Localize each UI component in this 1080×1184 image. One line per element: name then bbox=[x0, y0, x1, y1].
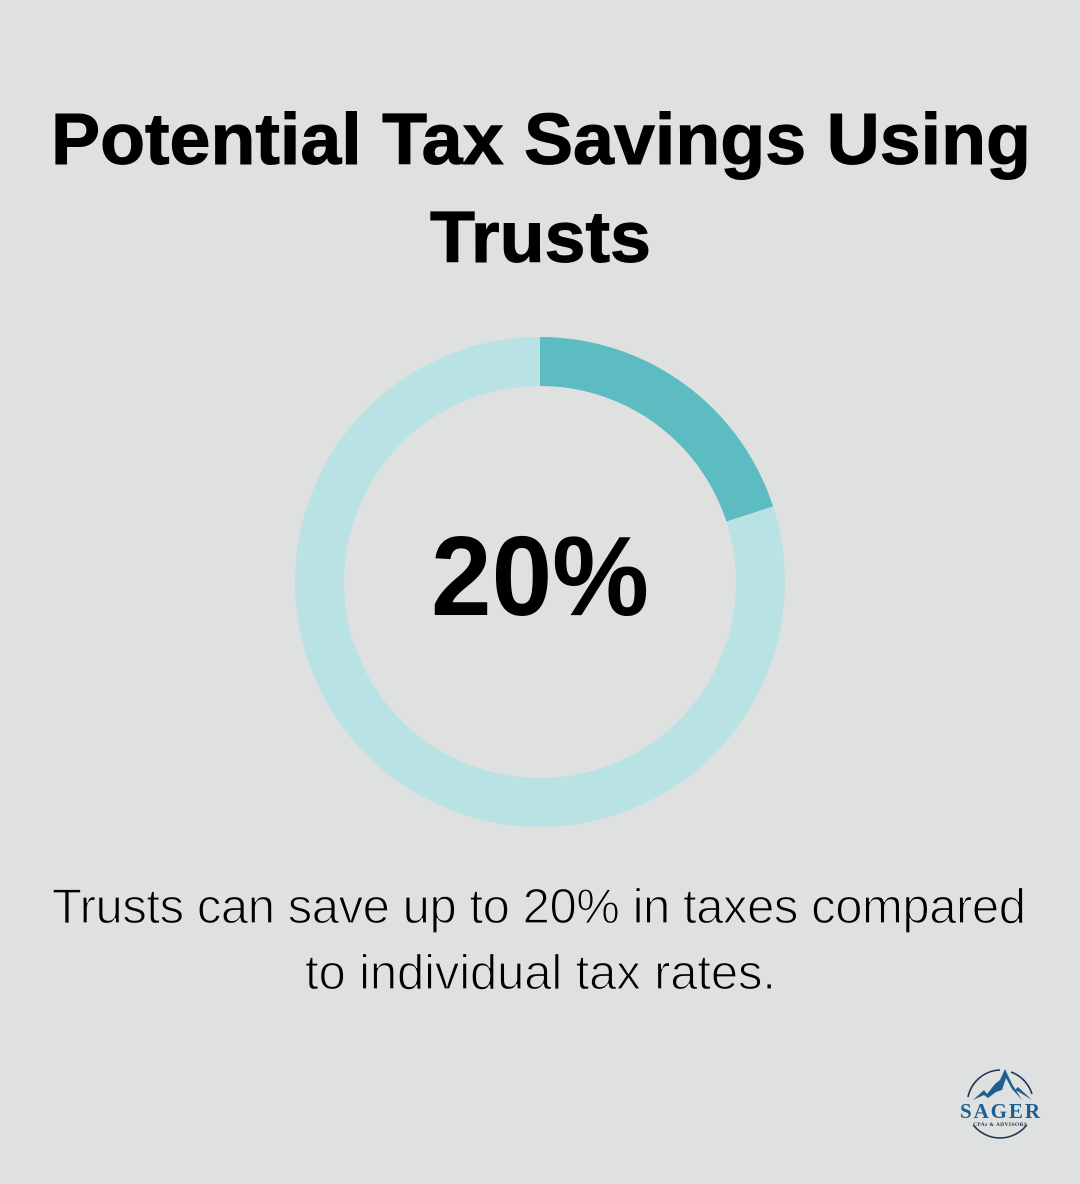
donut chart: 20% bbox=[320, 362, 760, 802]
donut highlighted segment bbox=[540, 362, 750, 514]
title: Potential Tax Savings Using bbox=[51, 100, 1031, 180]
logo: Sager CPAs & Advisors bbox=[960, 1069, 1041, 1138]
logo wordmark: SAGER bbox=[960, 1099, 1041, 1123]
center value: 20% bbox=[431, 513, 649, 639]
title bbox=[51, 100, 1031, 278]
description text bbox=[52, 880, 1026, 1000]
description text: Trusts can save up to 20% in taxes compared bbox=[52, 880, 1026, 934]
logo ring bbox=[968, 1070, 1000, 1097]
title: Trusts bbox=[430, 198, 651, 278]
logo mountain bbox=[973, 1069, 1032, 1100]
logo tagline: CPAs & ADVISORS bbox=[973, 1122, 1027, 1128]
donut track bbox=[320, 362, 760, 802]
description text: to individual tax rates. bbox=[305, 946, 776, 1000]
